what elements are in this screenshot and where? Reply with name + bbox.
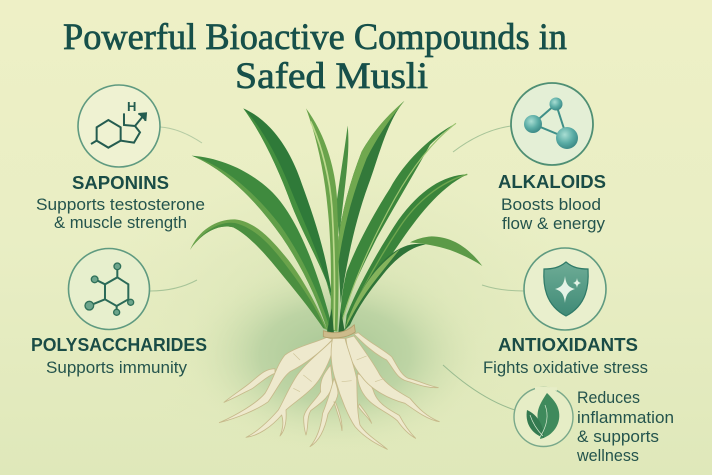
thin centre back leaf xyxy=(336,126,348,238)
connector: antioxidants xyxy=(482,285,524,291)
saponins text: Supports testosterone xyxy=(36,195,205,214)
saponins text: SAPONINS xyxy=(72,173,169,193)
panel: alkaloids xyxy=(498,83,606,233)
soft glow behind plant xyxy=(90,150,590,475)
title xyxy=(63,17,567,97)
wellness text: wellness xyxy=(576,446,639,465)
connector: wellness xyxy=(443,365,515,410)
upper right leaf xyxy=(338,101,404,303)
wellness text: Reduces xyxy=(577,388,640,407)
icon: saponin molecule: H xyxy=(127,99,136,114)
right drooping leaf base xyxy=(344,244,426,331)
centre light leaf xyxy=(306,108,339,332)
far left drooping leaf xyxy=(190,219,327,330)
antioxidants text: ANTIOXIDANTS xyxy=(498,335,638,355)
icon: alkaloid molecule xyxy=(511,83,593,165)
right long leaf xyxy=(340,123,456,328)
panel: saponins xyxy=(36,85,205,232)
icon: leaves xyxy=(514,388,573,446)
connector: polysaccharides xyxy=(150,280,197,291)
antioxidants text: Fights oxidative stress xyxy=(483,358,648,377)
alkaloids text: flow & energy xyxy=(502,214,605,233)
upper left leaf xyxy=(243,108,334,312)
right mid leaf xyxy=(345,174,467,328)
connector: alkaloids xyxy=(453,126,511,152)
polysaccharides text xyxy=(31,335,207,377)
plant roots xyxy=(219,325,439,449)
title: Safed Musli xyxy=(235,56,428,97)
polysaccharides text: Supports immunity xyxy=(46,358,187,377)
root glow xyxy=(185,260,485,450)
wellness text: & supports xyxy=(577,427,659,446)
alkaloids text xyxy=(498,172,606,233)
saponins text xyxy=(36,173,205,232)
polysaccharides text: POLYSACCHARIDES xyxy=(31,335,207,355)
alkaloids text: Boosts blood xyxy=(501,195,601,214)
plant leaves xyxy=(190,101,482,333)
panel: antioxidants xyxy=(483,248,648,377)
title: Powerful Bioactive Compounds in xyxy=(63,17,567,58)
antioxidants text xyxy=(483,335,648,377)
panel: wellness xyxy=(514,388,674,465)
connector: saponins xyxy=(160,127,202,143)
icon: shield xyxy=(524,248,606,330)
wellness text: inflammation xyxy=(577,408,674,427)
saponins text: & muscle strength xyxy=(54,213,187,232)
panel: polysaccharides xyxy=(31,248,207,377)
wellness text xyxy=(576,388,674,465)
alkaloids text: ALKALOIDS xyxy=(498,172,606,192)
icon: polysaccharide molecule xyxy=(68,248,150,330)
icon: saponin molecule xyxy=(78,85,160,167)
right drooping leaf tip xyxy=(410,236,482,266)
left long leaf xyxy=(192,156,333,332)
